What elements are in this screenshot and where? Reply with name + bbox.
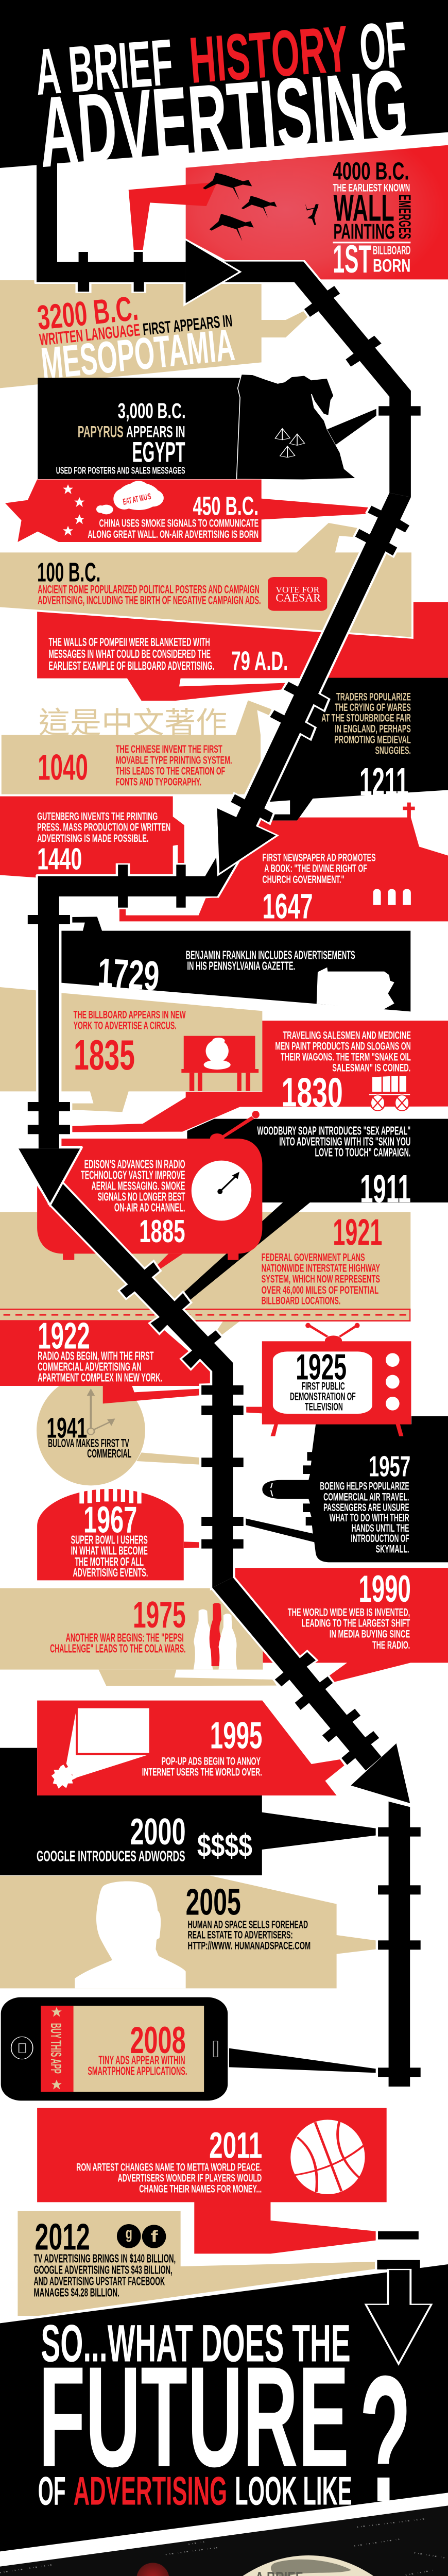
text: GUTENBERG INVENTS THE PRINTING <box>37 810 158 823</box>
icon: Vote for Caesar sign: CAESAR <box>275 591 321 604</box>
text: Boeing description <box>320 1480 409 1555</box>
panel: 1440 Gutenberg <box>0 796 184 877</box>
panel: 1975 Pepsi challenge: ANOTHER WAR BEGINS: THE "PEPSI <box>66 1631 184 1645</box>
icon: head and shoulders silhouette <box>75 1881 186 1988</box>
icon: football laces <box>79 1488 142 1503</box>
panel: 1885 Edison radio: AERIAL MESSAGING. SMOKE <box>92 1179 185 1192</box>
text: Woodbury description <box>257 1124 410 1159</box>
icon: Google and Facebook badges: f <box>150 2228 158 2246</box>
panel: 1925 television: TELEVISION <box>305 1400 343 1413</box>
panel: 1040 Chinese movable type: FONTS AND TYPOGRAPHY. <box>116 775 201 788</box>
panel: 2000 Google AdWords <box>0 1748 376 1875</box>
panel: 1967 Super Bowl: ADVERTISING EVENTS. <box>73 1566 148 1579</box>
panel: 1995 pop-up ads <box>37 1701 344 1795</box>
panel: 1885 Edison radio: SIGNALS NO LONGER BEST <box>98 1190 185 1203</box>
icon: basketball <box>290 2120 365 2194</box>
panel: 1885 Edison radio: TECHNOLOGY VASTLY IMPROVE <box>81 1168 185 1181</box>
icon: pop-up window <box>51 1708 149 1789</box>
panel: 2011 Metta World Peace: 2011 <box>209 2125 262 2166</box>
panel: 2012 ad revenues <box>18 2211 375 2316</box>
panel: 3200 B.C. Mesopotamia: WRITTEN LANGUAGE <box>39 320 141 349</box>
icon: clock hands <box>87 1388 115 1435</box>
text: Franklin description <box>186 948 355 973</box>
arrow: final outlined arrow <box>366 2269 432 2364</box>
panel: 1729 Benjamin Franklin: 1729 <box>97 950 161 999</box>
text: Gutenberg description <box>37 810 170 844</box>
panel: 1922 radio ads: 1922 <box>38 1315 90 1357</box>
icon: Pennsylvania map <box>317 968 394 1010</box>
panel: 2005 human ad space <box>0 1876 376 1988</box>
icon: Vote for Caesar sign: VOTE FOR <box>275 585 320 595</box>
timeline track with railroad ties <box>19 154 421 2269</box>
panel: 1967 Super Bowl <box>37 1488 199 1580</box>
icon: map of Egypt <box>236 375 376 480</box>
header background <box>0 0 448 168</box>
icon: Vote for Caesar sign <box>268 577 327 611</box>
panel: 1922 radio ads: COMMERCIAL ADVERTISING AN <box>38 1360 142 1374</box>
text: of advertising look like: OF <box>38 2468 66 2513</box>
text: THIS LEADS TO THE CREATION OF <box>116 765 225 777</box>
icon: church windows <box>373 889 411 905</box>
panel: 1941 Bulova: 1941 <box>46 1412 87 1444</box>
icon: Google and Facebook badges <box>117 2224 166 2248</box>
text: Bulova description <box>48 1437 131 1460</box>
text: Super Bowl description <box>71 1533 148 1579</box>
panel: 2012 ad revenues: 2012 <box>35 2216 90 2258</box>
panel: 2012 ad revenues: TV ADVERTISING BRINGS IN $140 BILLION, <box>33 2252 176 2265</box>
text: of advertising look like <box>38 2468 352 2513</box>
panel: 1647 church newspaper ad <box>119 803 448 926</box>
panel: 3000 B.C. Egypt papyrus: 3,000 B.C. <box>118 399 186 423</box>
panel: 1885 Edison radio: 1885 <box>139 1214 185 1249</box>
panel: 79 A.D. Pompeii walls <box>37 602 448 701</box>
panel: 1975 Pepsi challenge <box>0 1588 277 1686</box>
panel: 3000 B.C. Egypt papyrus: USED FOR POSTERS AND SALES MESSAGES <box>56 465 185 476</box>
text: highway description <box>262 1251 380 1307</box>
panel: 1922 radio ads <box>0 1315 212 1403</box>
panel: 1925 television <box>246 1323 411 1436</box>
text: television description <box>290 1380 356 1413</box>
panel: 1885 Edison radio: ON-AIR AD CHANNEL. <box>114 1201 185 1214</box>
panel: 1921 interstate highway <box>0 1212 410 1335</box>
text: Pompeii description <box>48 636 214 672</box>
text: pop-up description <box>142 1755 262 1778</box>
text: tiny ads description <box>88 2054 187 2078</box>
panel: 2000 Google AdWords: $$$$ <box>197 1827 252 1863</box>
text: PRESS. MASS PRODUCTION OF WRITTEN <box>37 821 170 834</box>
panel: 1967 Super Bowl: IN WHAT WILL BECOME <box>71 1544 148 1557</box>
panel: 1925 television: 1925 <box>296 1347 347 1387</box>
panel: 450 B.C. China smoke signals <box>5 480 369 542</box>
panel: 1830 snake oil salesmen <box>72 1021 448 1132</box>
panel: 2008 smartphone apps <box>1 1997 376 2100</box>
panel: 1040 Chinese movable type: 1040 <box>38 748 88 788</box>
panel: future section header <box>0 2264 448 2551</box>
text: salesmen description <box>275 1029 411 1074</box>
panel: 2012 ad revenues: GOOGLE ADVERTISING NETS $43 BILLION, <box>33 2263 173 2276</box>
panel: 1647 church newspaper ad: 1647 <box>262 887 313 926</box>
panel: 1967 Super Bowl: SUPER BOWL I USHERS <box>71 1533 148 1547</box>
panel: 2011 Metta World Peace <box>37 2108 387 2253</box>
panel: 1941 Bulova: COMMERCIAL <box>87 1447 131 1460</box>
icon: cave painting antelopes and hunter <box>203 173 319 241</box>
panel: 2000 Google AdWords: GOOGLE INTRODUCES ADWORDS <box>37 1848 185 1865</box>
panel: 1990 World Wide Web <box>234 1568 448 1682</box>
icon: cockpit windows <box>271 1483 272 1496</box>
panel: 3200 B.C. Mesopotamia: 3200 B.C. <box>36 289 140 337</box>
panel: 1835 billboard circus: YORK TO ADVERTISE A CIRCUS. <box>74 1020 177 1032</box>
panel: 3200 B.C. Mesopotamia <box>0 280 308 389</box>
text: newspaper ad description <box>262 852 376 886</box>
panel: 3000 B.C. Egypt papyrus: EGYPT <box>132 436 185 468</box>
text: emerges: EMERGES <box>395 195 414 239</box>
panel: 1729 Benjamin Franklin <box>61 917 410 1011</box>
panel: 1835 billboard circus <box>0 987 262 1112</box>
text: billboard description <box>74 1009 186 1032</box>
panel: 2008 smartphone apps: TINY ADS APPEAR WITHIN <box>98 2054 185 2067</box>
text: APARTMENT COMPLEX IN NEW YORK. <box>38 1371 162 1384</box>
text: Chinese movable type description <box>116 743 232 788</box>
panel: 1885 Edison radio <box>37 1111 262 1269</box>
icon: Google and Facebook badges: g <box>126 2224 132 2242</box>
text: human ad space description <box>188 1918 311 1952</box>
panel: 1830 snake oil salesmen: 1830 <box>282 1070 343 1115</box>
icon: smartphone: BUY THIS APP <box>47 2023 64 2074</box>
panel: 2008 smartphone apps: 2008 <box>130 2019 186 2061</box>
panel: 1040 Chinese movable type: THE CHINESE INVENT THE FIRST <box>116 743 222 755</box>
panel: 1925 television: FIRST PUBLIC <box>301 1380 345 1392</box>
icon: radio dial <box>192 1161 251 1221</box>
panel: 2012 ad revenues: AND ADVERTISING UPSTART FACEBOOK <box>33 2275 165 2288</box>
panel: 79 A.D. Pompeii walls: 79 A.D. <box>231 646 288 676</box>
panel: 1995 pop-up ads: 1995 <box>210 1714 262 1756</box>
text: Ron Artest description <box>76 2161 262 2195</box>
text: Pepsi description <box>50 1631 186 1655</box>
text: Edison description <box>81 1158 185 1214</box>
text: Chinese characters: 這是中文著作 <box>39 706 227 739</box>
text: revenue description <box>33 2252 176 2299</box>
text: ADVERTISING IS MADE POSSIBLE. <box>37 832 149 844</box>
panel: 450 B.C. China smoke signals: EAT AT WU'S <box>122 492 152 507</box>
arrow heads with white edges <box>19 241 410 1803</box>
panel: 1922 radio ads: RADIO ADS BEGIN, WITH THE FIRST <box>38 1349 154 1363</box>
panel: 450 B.C. China smoke signals: 450 B.C. <box>193 491 259 520</box>
panel: 2000 Google AdWords: 2000 <box>130 1811 186 1853</box>
icon: stars <box>63 484 84 536</box>
panel: 1975 Pepsi challenge: CHALLENGE" LEADS TO THE COLA WARS. <box>50 1642 186 1655</box>
title <box>32 7 411 189</box>
icon: smartphone <box>1 1997 228 2100</box>
panel: 1967 Super Bowl: THE MOTHER OF ALL <box>75 1555 144 1568</box>
text: China uses smoke signals <box>88 517 259 540</box>
icon: billboard with circus figure <box>181 1036 259 1091</box>
panel: 3200 B.C. Mesopotamia: FIRST APPEARS IN <box>142 311 233 339</box>
panel: 3000 B.C. Egypt papyrus: PAPYRUS <box>78 423 124 441</box>
panel: 1211 town criers <box>267 678 448 821</box>
icon: smoke cloud saying Eat at Wu's <box>96 481 164 514</box>
panel: 1911 Woodbury soap <box>183 1119 448 1300</box>
panel: 1835 billboard circus: 1835 <box>74 1031 135 1078</box>
text: radio ads description <box>38 1349 162 1384</box>
panel: 1040 Chinese movable type <box>2 700 271 794</box>
icon: red planet <box>136 2563 169 2576</box>
panel: 3000 B.C. Egypt papyrus <box>38 375 376 480</box>
panel: 100 B.C. Ancient Rome <box>0 523 411 637</box>
text: traders popularize <box>321 690 411 756</box>
icon: cola bottles <box>194 1603 237 1670</box>
panel: 1885 Edison radio: EDISON'S ADVANCES IN RADIO <box>84 1158 185 1171</box>
panel: 1957 Boeing air travel <box>246 1416 448 1562</box>
icon: moon with advertisement <box>188 2555 428 2576</box>
panel: 100 B.C. Ancient Rome: 100 B.C. <box>37 557 100 587</box>
text: Ancient Rome description <box>38 584 261 607</box>
text: web description <box>288 1606 410 1651</box>
panel: 2005 human ad space: 2005 <box>186 1882 241 1923</box>
panel: 1995 pop-up ads: POP-UP ADS BEGIN TO ANNOY <box>161 1755 261 1768</box>
panel: 1967 Super Bowl: 1967 <box>83 1499 137 1540</box>
panel: 1835 billboard circus: THE BILLBOARD APPEARS IN NEW <box>74 1009 186 1021</box>
panel: 1941 Bulova: BULOVA MAKES FIRST TV <box>48 1437 129 1450</box>
icon: covered wagon <box>369 1076 410 1111</box>
road markings <box>0 1309 410 1335</box>
text: MOVABLE TYPE PRINTING SYSTEM. <box>116 754 232 766</box>
icon: TV knobs <box>386 1353 400 1411</box>
panel: 3000 B.C. Egypt papyrus: APPEARS IN <box>126 423 185 441</box>
panel: buying moon ad space <box>0 2505 448 2576</box>
panel: 1941 Bulova <box>37 1376 199 1485</box>
panel: 1440 Gutenberg: 1440 <box>37 842 82 876</box>
panel: 2008 smartphone apps: SMARTPHONE APPLICATIONS. <box>88 2064 187 2078</box>
text: revenue description: MANAGES $4.28 BILLION. <box>33 2286 119 2299</box>
panel: 1975 Pepsi challenge: 1975 <box>133 1594 186 1636</box>
panel: 4000 B.C. wall painting <box>129 145 448 281</box>
